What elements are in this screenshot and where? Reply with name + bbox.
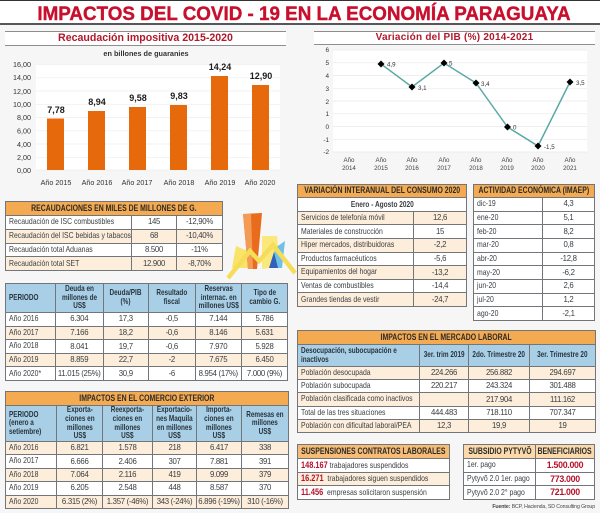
table: economic activity IMAEP: 4,3: [564, 199, 573, 208]
table: macro indicators: 11.015 (25%): [58, 369, 101, 378]
table: macro indicators: -0,6: [166, 342, 178, 351]
table: foreign trade: Exportacio-: [157, 406, 192, 414]
bar values: 8,94: [88, 97, 106, 107]
table: economic activity IMAEP: -6,2: [562, 268, 575, 277]
table: macro indicators: Deuda/PIB: [110, 288, 142, 297]
x axis labels: 2014: [342, 165, 356, 172]
table: Pytyvo subsidy: 1er. pago: [467, 460, 496, 469]
table: labour market: 19,9: [492, 421, 506, 430]
table: macro indicators: 8.859: [70, 355, 88, 364]
table: labour market: 256.882: [486, 368, 512, 377]
table: macro indicators: 8.041: [70, 342, 88, 351]
x axis labels: Año 2018: [164, 178, 194, 187]
y axis labels: [323, 47, 329, 156]
table: economic activity IMAEP: abr-20: [477, 254, 497, 263]
table: consumption variation: Servicios de telefonía móvil: [301, 213, 385, 222]
table: foreign trade: Año 2017: [9, 456, 38, 465]
table: macro indicators: Tipo de: [253, 288, 276, 297]
table: foreign trade: ciones en: [113, 414, 142, 423]
table: foreign trade: ciones en: [65, 414, 94, 423]
table: tax collections: Recaudación de ISC combustibles: [9, 217, 114, 226]
table: economic activity IMAEP: mar-20: [477, 240, 499, 249]
table: macro indicators: Reservas: [204, 284, 232, 293]
y axis labels: -2: [323, 149, 329, 156]
bar values: [47, 62, 272, 115]
table: economic activity IMAEP: ene-20: [477, 213, 498, 222]
table: macro indicators: 7.970: [209, 342, 227, 351]
bar chart: tax revenue: [13, 49, 280, 187]
table: labour market: Población clasificada como inactivos: [301, 394, 413, 403]
table: economic activity IMAEP: feb-20: [477, 227, 497, 236]
table: consumption variation: Equipamientos del hogar: [301, 267, 377, 276]
table: foreign trade: 6.821: [70, 443, 88, 452]
data labels: 3,5: [576, 80, 585, 87]
x axis labels: 2020: [531, 165, 545, 172]
table: foreign trade: 307: [168, 457, 181, 466]
table: macro indicators: 7.000 (9%): [247, 369, 282, 378]
table: foreign trade: Año 2019: [9, 483, 38, 492]
table: labour market: Población desocupada: [301, 368, 371, 377]
table: macro indicators: Año 2020*: [9, 369, 41, 378]
x axis labels: Año: [375, 157, 387, 164]
top title band: [0, 0, 600, 25]
table: foreign trade: 6.666: [70, 457, 88, 466]
table: macro indicators: 5.786: [255, 314, 274, 323]
x axis labels: 2015: [374, 165, 388, 172]
data labels: 3,4: [481, 81, 490, 88]
table: labour market: 294.697: [549, 368, 576, 377]
table: economic activity IMAEP: 1,2: [564, 295, 573, 304]
heading: GDP chart: Variación del PIB (%) 2014-2021: [376, 32, 533, 43]
x axis labels: 2021: [563, 165, 577, 172]
line series: [381, 63, 570, 146]
y axis labels: [13, 60, 31, 175]
y axis labels: 5: [325, 60, 329, 67]
x axis labels: 2019: [500, 165, 514, 172]
table: labour market: 3er. trim 2019: [424, 350, 464, 359]
table: consumption variation: Ventas de combustibles: [301, 281, 374, 290]
table: consumption variation: Productos farmacéuticos: [301, 254, 377, 263]
table: consumption variation: Grandes tiendas de vestir: [301, 295, 379, 304]
table: labour market: 111.162: [550, 395, 575, 404]
table: macro indicators: Año 2017: [9, 328, 38, 337]
x axis labels: Año: [532, 157, 544, 164]
data labels: 4,9: [387, 62, 396, 68]
table: macro indicators: PERIODO: [9, 293, 38, 302]
x axis labels: Año: [343, 157, 355, 164]
table: foreign trade: setiembre): [9, 427, 41, 436]
table: foreign trade: 2.406: [118, 457, 136, 466]
table: consumption variation: 15: [436, 227, 444, 236]
table: foreign trade: 338: [259, 443, 271, 452]
table: consumption variation: Hiper mercados, distribuidoras: [301, 240, 394, 249]
table: macro indicators: cambio G.: [249, 297, 280, 306]
table: tax collections: 68: [150, 231, 158, 240]
table: economic activity IMAEP: ago-20: [477, 309, 498, 318]
table: foreign trade: ciones en: [204, 414, 234, 423]
table: labour market: 301.488: [549, 381, 576, 390]
x axis labels: Año 2017: [122, 178, 152, 187]
heading: GDP chart: [314, 31, 595, 45]
table: foreign trade: 2.548: [118, 483, 136, 492]
table: foreign trade: 6.896 (-19%): [198, 497, 240, 506]
y axis labels: 4: [325, 73, 329, 80]
table: labour market: 12,3: [437, 421, 451, 430]
table: tax collections: -10,40%: [186, 231, 213, 240]
table: macro indicators: (%): [121, 297, 131, 306]
table: macro indicators: 6.304: [70, 314, 88, 323]
x axis labels: Año 2020: [245, 178, 275, 187]
bar values: 14,24: [209, 62, 231, 72]
y axis labels: 8,00: [17, 113, 31, 122]
table: foreign trade: millones: [115, 422, 140, 432]
x axis labels: Año 2019: [205, 178, 235, 187]
y axis labels: 2,00: [17, 153, 31, 162]
table: macro indicators: 5.631: [255, 328, 274, 337]
bars: [47, 76, 269, 170]
table: consumption variation: [297, 184, 467, 307]
table: macro indicators: Año 2016: [9, 314, 38, 323]
table: foreign trade: 1.357 (-46%): [107, 497, 148, 506]
bar values: 9,83: [170, 91, 188, 101]
table: foreign trade: millones: [206, 422, 232, 432]
chart subtitle: en billones de guaranies: [103, 49, 189, 58]
table: labour market: [297, 330, 596, 433]
table: foreign trade: 6.315 (2%): [62, 497, 97, 506]
table: labour market: 224.266: [431, 368, 457, 377]
table: foreign trade: Año 2018: [9, 470, 38, 479]
table: foreign trade: 7.064: [70, 470, 88, 479]
bar values: 9,58: [129, 93, 147, 103]
table: tax collections: RECAUDACIONES EN MILES DE MILLONES DE G.: [31, 203, 197, 214]
x axis labels: 2016: [405, 165, 419, 172]
x axis labels: [342, 157, 577, 172]
table: foreign trade: 1.578: [118, 443, 136, 452]
table: economic activity IMAEP: 5,1: [564, 213, 573, 222]
table: macro indicators: US$: [73, 301, 85, 310]
y axis labels: 4,00: [17, 140, 31, 149]
table: macro indicators: 7.144: [209, 314, 227, 323]
table: foreign trade: US$: [259, 427, 271, 436]
table: Pytyvo subsidy: BENEFICIARIOS: [538, 446, 592, 457]
table: foreign trade: 310 (-16%): [247, 497, 283, 506]
table: macro indicators: 18,2: [119, 328, 133, 337]
table: labour market: 220.217: [431, 381, 457, 390]
table: economic activity IMAEP: [473, 184, 595, 321]
table: foreign trade: (enero a: [9, 418, 34, 427]
table: labour market: 2do. Trimestre 20: [473, 350, 525, 359]
table: Pytyvo subsidy: 721.000: [550, 487, 580, 497]
bar values: 7,78: [47, 105, 65, 115]
table: foreign trade: Reexporta-: [111, 406, 144, 414]
table: tax collections: -12,90%: [186, 217, 213, 226]
table: economic activity IMAEP: -2,1: [562, 309, 575, 318]
table: labour market: Total de las tres situaciones: [301, 408, 385, 417]
table: labour market: IMPACTOS EN EL MERCADO LABORAL: [381, 332, 512, 343]
table: foreign trade: Remesas en: [246, 410, 284, 419]
table: foreign trade: millones: [252, 418, 278, 427]
table: Pytyvo subsidy: 1.500.000: [547, 460, 583, 470]
table: foreign trade: US$: [168, 431, 181, 440]
table: foreign trade: 370: [259, 483, 271, 492]
title: IMPACTOS DEL COVID - 19 EN LA ECONOMÍA PARAGUAYA: [37, 3, 571, 25]
data labels: 5: [449, 60, 453, 68]
table: economic activity IMAEP: 2,6: [564, 281, 573, 290]
table: foreign trade: US$: [73, 431, 86, 440]
table: tax collections: [5, 201, 223, 271]
table: foreign trade: Año 2020: [9, 497, 38, 506]
table: macro indicators: -0,5: [166, 314, 178, 323]
table: foreign trade: 391: [259, 457, 271, 466]
y axis labels: 10,00: [13, 100, 31, 109]
table: macro indicators: -0,6: [166, 328, 178, 337]
table: consumption variation: Materiales de construcción: [301, 227, 383, 236]
table: Pytyvo subsidy: [463, 444, 595, 500]
table: foreign trade: Importa-: [206, 406, 232, 414]
y axis labels: 1: [325, 111, 329, 118]
table: Pytyvo subsidy: SUBSIDIO PYTYVÕ: [468, 446, 531, 457]
table: labour market: 19: [558, 421, 567, 430]
x axis labels: Año: [501, 157, 513, 164]
y axis labels: 2: [325, 99, 329, 106]
heading: tax revenue chart: Recaudación impositiva 2015-2020: [58, 32, 233, 44]
table: macro indicators: 7.166: [70, 328, 88, 337]
line chart: GDP variation: [323, 47, 587, 172]
table: macro indicators: Año 2019: [9, 355, 38, 364]
table: foreign trade: 419: [168, 470, 181, 479]
x axis labels: Año 2016: [82, 178, 112, 187]
table: economic activity IMAEP: dic-19: [477, 199, 496, 208]
table: labour market: 3er. Trimestre 20: [537, 350, 588, 359]
table: Pytyvo subsidy: Pytyvõ 2.0 2° pago: [467, 488, 525, 497]
table: labour market: 243.324: [486, 381, 512, 390]
y axis labels: 0: [325, 124, 329, 131]
table: labour market: inactivos: [301, 354, 329, 364]
table: macro indicators: 7.675: [209, 355, 227, 364]
x axis labels: Año: [438, 157, 450, 164]
table: foreign trade: en millones: [157, 422, 192, 432]
table: consumption variation: -2,2: [434, 240, 446, 249]
y axis labels: 12,00: [13, 87, 31, 96]
table: labour contract suspensions: SUSPENSIONES CONTRATOS LABORALES: [301, 446, 446, 457]
icon: 3D bars with zigzag arrow: [226, 213, 297, 280]
table: tax collections: -8,70%: [188, 259, 211, 268]
table: foreign trade: IMPACTOS EN EL COMERCIO EXTERIOR: [79, 393, 215, 404]
table: labour market: 217.904: [486, 395, 512, 404]
table: tax collections: 12.900: [143, 259, 165, 268]
table: economic activity IMAEP: ACTIVIDAD ECONÓMICA (IMAEP): [479, 185, 589, 196]
table: foreign trade: 6.205: [70, 483, 88, 492]
table: foreign trade: 2.116: [119, 470, 136, 479]
data labels: -1,5: [544, 144, 555, 151]
table: economic activity IMAEP: 0,8: [564, 240, 573, 249]
x axis labels: 2018: [469, 165, 483, 172]
table: macro indicators: fiscal: [164, 297, 180, 306]
x axis labels: [41, 178, 275, 187]
table: consumption variation: -14,4: [432, 281, 448, 290]
y axis labels: 0,00: [17, 166, 31, 175]
table: labour contract suspensions: [297, 444, 450, 500]
table: macro indicators: 30,9: [119, 369, 133, 378]
table: tax collections: Recaudación total SET: [9, 259, 79, 268]
source note: Fuente: BCP, Hacienda, SD Consulting Group: [492, 504, 595, 510]
x axis labels: Año: [406, 157, 418, 164]
x axis labels: Año: [470, 157, 482, 164]
y axis labels: 16,00: [13, 60, 31, 69]
x axis labels: Año: [564, 157, 576, 164]
table: macro indicators: 17,3: [119, 314, 133, 323]
table: macro indicators: 6.450: [255, 355, 274, 364]
heading: tax revenue chart: [5, 31, 286, 46]
table: foreign trade: US$: [213, 431, 225, 440]
table: tax collections: Recaudación total Aduanas: [9, 245, 93, 254]
table: Pytyvo subsidy: Pytyvõ 2.0 1er. pago: [467, 474, 530, 483]
data labels: 3,1: [418, 85, 427, 92]
table: economic activity IMAEP: may-20: [477, 268, 500, 276]
table: macro indicators: 19,7: [119, 342, 133, 351]
table: foreign trade: 9.099: [210, 470, 228, 479]
x axis labels: Año 2015: [41, 178, 71, 187]
table: foreign trade: 448: [168, 483, 181, 492]
table: foreign trade: 343 (-24%): [157, 497, 192, 506]
table: foreign trade: millones: [67, 422, 92, 432]
table: macro indicators: 5.928: [255, 342, 274, 351]
table: labour market: Población subocupada: [301, 381, 371, 390]
y axis labels: -1: [323, 137, 329, 144]
table: labour market: 718.110: [486, 408, 512, 417]
table: foreign trade: PERIODO: [9, 410, 38, 419]
table: macro indicators: Resultado: [156, 288, 187, 297]
table: consumption variation: 12,6: [433, 213, 447, 222]
y axis labels: 3: [325, 86, 329, 93]
table: foreign trade: [5, 391, 289, 509]
table: labour contract suspensions: 148.167 trabajadores suspendidos: [301, 460, 408, 470]
table: foreign trade: Año 2016: [9, 443, 38, 452]
table: foreign trade: 6.417: [210, 443, 228, 452]
table: macro indicators: millones de: [62, 293, 97, 302]
table: macro indicators: 22,7: [119, 355, 133, 364]
x axis labels: 2017: [437, 165, 451, 172]
table: economic activity IMAEP: jun-20: [477, 281, 496, 290]
table: labour market: Desocupación, subocupación e: [301, 346, 397, 355]
table: macro indicators: Año 2018: [9, 341, 38, 350]
table: macro indicators: [5, 283, 288, 381]
table: macro indicators: -2: [169, 355, 175, 364]
table: tax collections: 8.500: [145, 245, 163, 254]
table: labour market: 707.347: [549, 408, 576, 417]
table: macro indicators: 8.954 (17%): [199, 369, 238, 378]
table: consumption variation: -13,2: [432, 268, 448, 277]
table: Pytyvo subsidy: 773.000: [550, 474, 580, 484]
bar values: 12,90: [250, 71, 272, 81]
table: labour contract suspensions: 16.271 trabajadores siguen suspendidos: [301, 473, 428, 483]
table: foreign trade: Exporta-: [67, 406, 92, 414]
y axis labels: 6,00: [17, 126, 31, 136]
table: macro indicators: 8.146: [209, 328, 227, 337]
y axis labels: 6: [325, 47, 329, 54]
table: macro indicators: Deuda en: [65, 284, 94, 293]
y axis labels: 14,00: [13, 73, 31, 82]
table: economic activity IMAEP: 8,2: [564, 227, 573, 236]
table: economic activity IMAEP: jul-20: [477, 295, 494, 304]
table: tax collections: 145: [148, 217, 160, 226]
table: consumption variation: -5,6: [434, 254, 446, 263]
table: economic activity IMAEP: -12,8: [560, 254, 577, 263]
table: foreign trade: 379: [259, 470, 271, 479]
table: foreign trade: 8.587: [210, 483, 228, 492]
data labels: 0: [513, 124, 517, 132]
table: labour market: 444.483: [431, 408, 457, 417]
table: foreign trade: 218: [168, 443, 181, 452]
data markers: [378, 60, 574, 150]
table: labour contract suspensions: 11.456 empresas solicitaron suspensión: [301, 487, 427, 497]
table: foreign trade: 7.881: [210, 457, 228, 466]
table: macro indicators: -6: [169, 369, 175, 378]
data labels: [387, 60, 585, 151]
table: tax collections: -11%: [191, 245, 208, 254]
table: consumption variation: -24,7: [432, 295, 448, 304]
table: consumption variation: Enero - Agosto 2020: [351, 199, 413, 209]
table: consumption variation: VARIACIÓN INTERANUAL DEL CONSUMO 2020: [304, 185, 460, 196]
table: foreign trade: nes Maquila: [156, 414, 193, 423]
table: tax collections: Recaudación del ISC bebidas y tabacos: [9, 231, 131, 240]
table: macro indicators: internac. en: [200, 293, 236, 302]
table: foreign trade: US$: [121, 431, 134, 440]
table: macro indicators: millones US$: [198, 301, 238, 310]
table: labour market: Población con dificultad laboral/PEA: [301, 421, 411, 430]
